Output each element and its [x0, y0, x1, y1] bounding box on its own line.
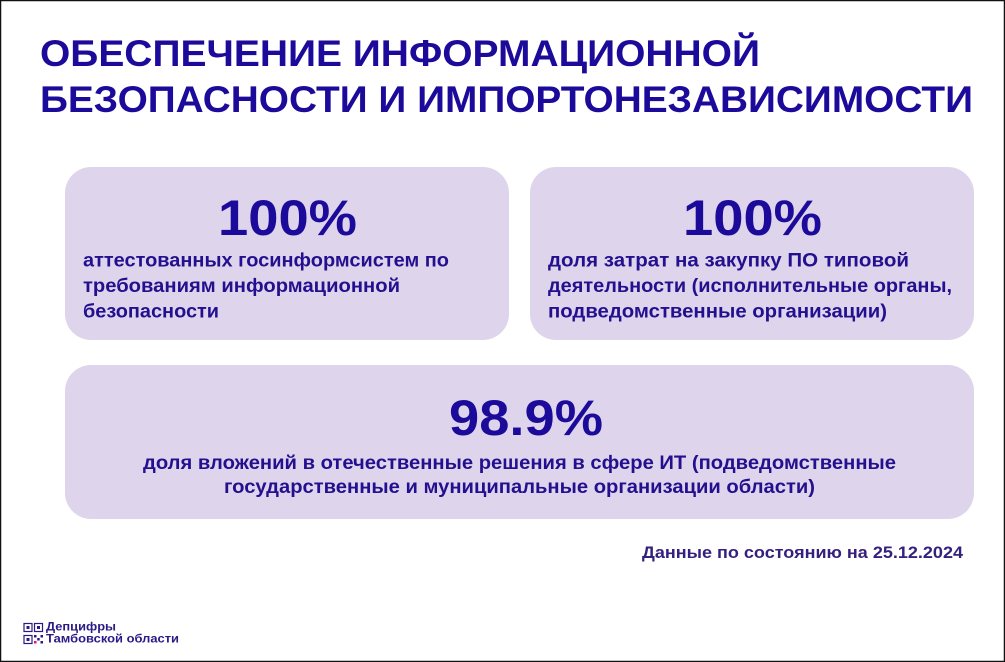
description: attested systems: [83, 250, 449, 322]
description: domestic IT investment: государственные и муниципальные организации области): [224, 476, 815, 498]
stat: 100% attested: 100%: [218, 190, 357, 246]
title: БЕЗОПАСНОСТИ И ИМПОРТОНЕЗАВИСИМОСТИ: [40, 78, 973, 120]
title: [40, 32, 973, 120]
description: domestic IT investment: доля вложений в отечественные решения в сфере ИТ (подведомственные: [143, 452, 896, 474]
panel: attested information systems: [65, 167, 509, 340]
description: domestic IT investment: [143, 452, 896, 498]
data date note: Данные по состоянию на 25.12.2024: [642, 543, 964, 562]
description: attested systems: требованиям информационной: [83, 275, 400, 297]
description: software procurement: [548, 250, 952, 322]
description: attested systems: аттестованных госинформсистем по: [83, 250, 449, 272]
stat: 98.9%: 98.9%: [449, 390, 603, 446]
panel: domestic IT investment share: [65, 365, 974, 519]
description: software procurement: доля затрат на закупку ПО типовой: [548, 250, 909, 272]
stat: 100% software: 100%: [683, 190, 822, 246]
logo: department of digital: [24, 622, 179, 646]
logo text: Депцифры: [46, 622, 116, 634]
icon: QR squares: [24, 624, 43, 644]
logo text: [46, 622, 179, 646]
logo text: Тамбовской области: [46, 634, 179, 646]
description: attested systems: безопасности: [83, 300, 219, 322]
description: software procurement: подведомственные организации): [548, 300, 887, 322]
description: software procurement: деятельности (исполнительные органы,: [548, 275, 952, 297]
panel: software procurement share: [530, 167, 974, 340]
title: ОБЕСПЕЧЕНИЕ ИНФОРМАЦИОННОЙ: [40, 32, 760, 74]
